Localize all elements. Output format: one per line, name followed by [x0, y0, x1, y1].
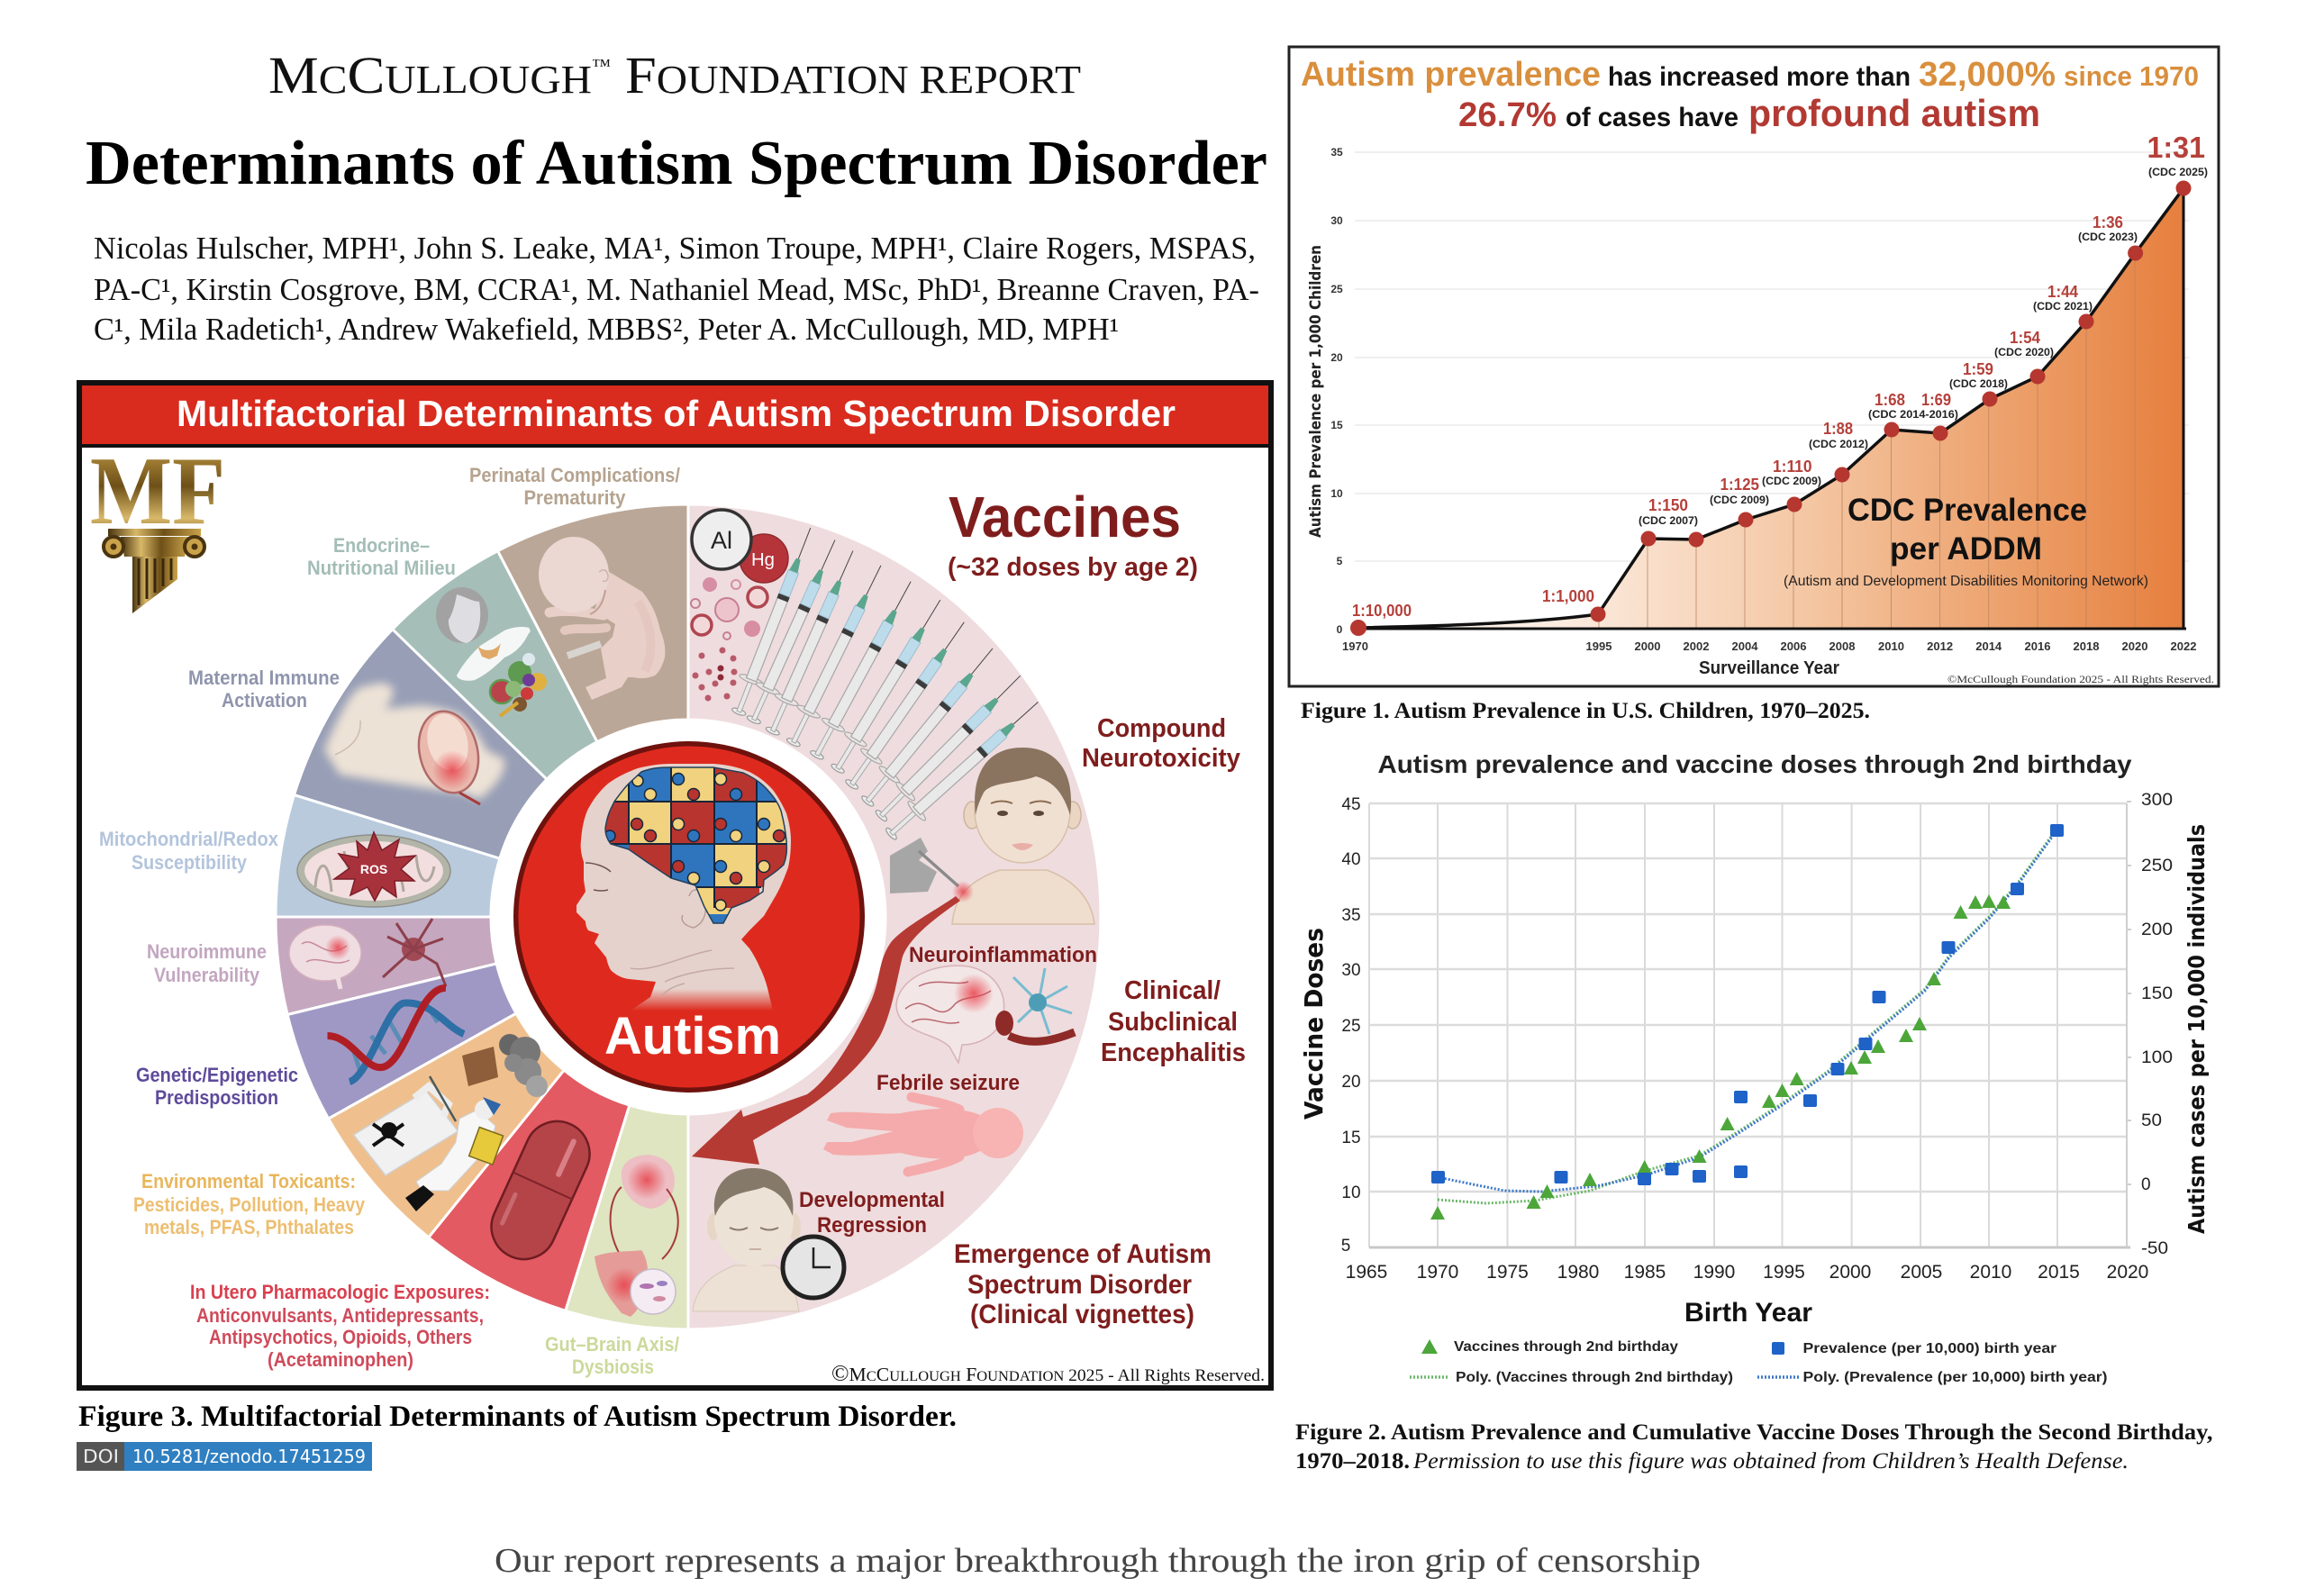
- label: neuroimmune: Vulnerability: [154, 964, 260, 986]
- headline: Autism prevalence: [1301, 56, 1601, 94]
- label: endocrine: [307, 534, 456, 579]
- legend: Poly. (Vaccines through 2nd birthday): [1456, 1370, 1733, 1385]
- figure 2 chart: prevalence and vaccine doses: [1299, 750, 2210, 1385]
- label: pharmacologic exposures: (Acetaminophen): [268, 1348, 413, 1371]
- segment: gut-brain: [566, 1105, 688, 1329]
- legend: Vaccines through 2nd birthday: [1454, 1339, 1678, 1355]
- icon: woman with thyroid and food: [436, 587, 547, 716]
- icon: aluminium and mercury circles: Al: [711, 527, 732, 554]
- label: maternal immune: [188, 667, 340, 712]
- label: compound neurotoxicity: [1082, 714, 1240, 773]
- icon: brain and microglia: [289, 919, 446, 989]
- prevalence ratio labels: 1:150: [1648, 496, 1688, 514]
- heading: vaccines: Vaccines: [949, 485, 1181, 549]
- prevalence ratio labels: 1:125: [1720, 476, 1759, 494]
- chart: CDC prevalence area chart: [1307, 131, 2214, 685]
- label: encephalitis: [1101, 976, 1246, 1067]
- copyright line: ©MCCULLOUGH FOUNDATION 2025 - All Rights Reserved.: [831, 1362, 1265, 1386]
- panel: multifactorial determinants wheel: [79, 383, 1271, 1388]
- prevalence ratio labels: (CDC 2012): [1809, 438, 1868, 450]
- icon: infant receiving injection: [890, 748, 1094, 924]
- y axis ticks: 15: [1330, 419, 1343, 431]
- prevalence ratio labels: (CDC 2020): [1994, 346, 2054, 358]
- x axis labels: 1990: [1693, 1262, 1735, 1283]
- left axis labels: 20: [1341, 1073, 1361, 1092]
- heading: vaccines: (~32 doses by age 2): [948, 553, 1198, 582]
- prevalence ratio labels: 1:10,000: [1352, 602, 1412, 620]
- segment: pharmacologic: [429, 1070, 630, 1310]
- label: mitochondrial: Susceptibility: [132, 851, 248, 874]
- label: environmental toxicants: [133, 1170, 366, 1238]
- label: pharmacologic exposures: Anticonvulsants, Antidepressants,: [196, 1304, 484, 1327]
- prevalence ratio labels: (CDC 2018): [1949, 377, 2008, 390]
- x axis labels: 1985: [1624, 1262, 1666, 1283]
- segment: endocrine: [393, 551, 597, 779]
- x axis labels: 1995: [1763, 1262, 1805, 1283]
- label: compound neurotoxicity: Neurotoxicity: [1082, 744, 1240, 773]
- right axis labels: 100: [2141, 1048, 2173, 1067]
- x axis ticks: [1342, 639, 2196, 653]
- DOI badge: DOI: [83, 1446, 119, 1467]
- label: encephalitis: Clinical/: [1124, 976, 1221, 1005]
- x axis ticks: 2008: [1829, 639, 1855, 653]
- icon: gut-brain axis: [595, 1155, 678, 1317]
- chart: wheel segments: [276, 504, 1101, 1329]
- label: maternal immune: Maternal Immune: [188, 667, 340, 689]
- label: febrile seizure: Febrile seizure: [876, 1071, 1020, 1095]
- label: emergence of autism: Spectrum Disorder: [967, 1270, 1192, 1300]
- prevalence ratio labels: 1:68: [1875, 391, 1905, 409]
- foundation wordmark: ™: [592, 56, 611, 76]
- right axis labels: 300: [2141, 791, 2173, 810]
- headline: 32,000%: [1919, 56, 2056, 94]
- foundation wordmark: F: [611, 46, 657, 104]
- wheel labels: right side: [799, 485, 1265, 1386]
- left axis labels: 40: [1341, 850, 1361, 869]
- label: compound neurotoxicity: Compound: [1097, 714, 1226, 743]
- x axis ticks: 2022: [2171, 639, 2196, 653]
- label: pharmacologic exposures: In Utero Pharmacologic Exposures:: [190, 1281, 490, 1303]
- x axis labels: 1970: [1417, 1262, 1458, 1283]
- headline: since 1970: [2064, 60, 2199, 92]
- prevalence ratio labels: (CDC 2007): [1639, 514, 1698, 527]
- figure 3 caption: Figure 3. Multifactorial Determinants of Autism Spectrum Disorder.: [78, 1401, 957, 1433]
- right axis labels: 200: [2141, 920, 2173, 939]
- figure 2 chart: prevalence and vaccine doses: Birth Year: [1684, 1298, 1812, 1328]
- x axis labels: 2015: [2038, 1262, 2080, 1283]
- series: vaccines through 2nd birthday: [1430, 894, 2011, 1220]
- copyright: ©McCullough Foundation 2025 - All Rights Reserved.: [1947, 673, 2214, 685]
- figure 2 caption: Figure 2. Autism Prevalence and Cumulative Vaccine Doses Through the Second Birthday,: [1295, 1420, 2212, 1445]
- x axis labels: 1975: [1486, 1262, 1529, 1283]
- icon: MF column logo: MF: [90, 438, 225, 545]
- label: developmental regression: Regression: [817, 1213, 927, 1238]
- plot grid: [1369, 802, 2131, 1247]
- segment: environmental: [329, 1013, 564, 1238]
- x axis ticks: 2002: [1684, 639, 1709, 653]
- label: perinatal: [469, 464, 680, 509]
- authors: PA-C¹, Kirstin Cosgrove, BM, CCRA¹, M. Nathaniel Mead, MSc, PhD¹, Breanne Craven, PA-: [94, 272, 1259, 307]
- icon: central autism circle: [513, 741, 865, 1093]
- axis titles: Autism Prevalence per 1,000 Children: [1307, 245, 1325, 538]
- prevalence ratio labels: 1:110: [1773, 458, 1812, 476]
- left axis labels: 30: [1341, 961, 1361, 980]
- label: perinatal: Perinatal Complications/: [469, 464, 680, 486]
- y axis ticks: 30: [1330, 214, 1343, 227]
- icon: capsule pill: [481, 1111, 600, 1270]
- y axis ticks: 0: [1337, 623, 1343, 636]
- icon: aluminium and mercury circles: [692, 510, 788, 583]
- x axis labels: [1346, 1262, 2148, 1283]
- right axis labels: [2141, 791, 2173, 1258]
- label: perinatal: Prematurity: [524, 486, 626, 509]
- prevalence ratio labels: 1:36: [2093, 213, 2123, 231]
- main title: Determinants of Autism Spectrum Disorder: [86, 129, 1267, 198]
- label: gut-brain: Dysbiosis: [572, 1356, 654, 1378]
- prevalence ratio labels: 1:59: [1963, 360, 1993, 378]
- icon: sleeping child and clock: [693, 1168, 844, 1311]
- x axis labels: 2000: [1829, 1262, 1871, 1283]
- x axis ticks: 2010: [1878, 639, 1904, 653]
- label: developmental regression: [799, 1188, 945, 1238]
- right axis labels: 250: [2141, 857, 2173, 875]
- panel header bar: [82, 385, 1268, 448]
- label: endocrine: Nutritional Milieu: [307, 557, 456, 579]
- prevalence ratio labels: (CDC 2023): [2078, 231, 2138, 243]
- label: encephalitis: Encephalitis: [1101, 1038, 1246, 1067]
- report header: [86, 46, 1267, 347]
- prevalence ratio labels: 1:88: [1823, 420, 1853, 438]
- x axis ticks: 2006: [1781, 639, 1806, 653]
- headline: 26.7%: [1458, 96, 1557, 134]
- prevalence ratio labels: (CDC 2025): [2148, 166, 2208, 178]
- legend: Prevalence (per 10,000) birth year: [1803, 1341, 2056, 1356]
- prevalence ratio labels: 1:54: [2010, 329, 2040, 347]
- label: emergence of autism: [954, 1239, 1212, 1329]
- figure 2 caption: [1295, 1420, 2212, 1474]
- x axis ticks: 1995: [1586, 639, 1611, 653]
- left axis labels: 15: [1341, 1129, 1361, 1147]
- x axis ticks: 2000: [1635, 639, 1660, 653]
- arrow: curved progression arrow: [692, 896, 960, 1165]
- left axis labels: 10: [1341, 1183, 1361, 1202]
- label: neuroimmune: Neuroimmune: [147, 940, 267, 963]
- figure 2 caption: Permission to use this figure was obtained from Children’s Health Defense.: [1412, 1449, 2129, 1474]
- label: maternal immune: Activation: [222, 689, 307, 712]
- label: pharmacologic exposures: Antipsychotics, Opioids, Others: [209, 1326, 472, 1348]
- label: environmental toxicants: Environmental Toxicants:: [141, 1170, 356, 1192]
- x axis ticks: 2016: [2025, 639, 2050, 653]
- DOI badge: [77, 1442, 372, 1471]
- y axis ticks: 20: [1330, 351, 1343, 364]
- icon: virus and particle cluster: [691, 577, 767, 701]
- heading: vaccines: [948, 485, 1198, 582]
- authors: C¹, Mila Radetich¹, Andrew Wakefield, MBBS², Peter A. McCullough, MD, MPH¹: [94, 312, 1119, 347]
- figure 2 chart: prevalence and vaccine doses: Autism cases per 10,000 individuals: [2183, 824, 2210, 1234]
- icon: febrile infant: [823, 1097, 1023, 1172]
- icon: fetus: [539, 537, 665, 700]
- right axis labels: -50: [2141, 1239, 2168, 1258]
- prevalence ratio labels: 1:69: [1921, 391, 1951, 409]
- label: developmental regression: Developmental: [799, 1188, 945, 1212]
- foundation wordmark: MCCULLOUGH: [268, 46, 576, 104]
- chart title: Autism prevalence and vaccine doses through 2nd birthday: [1378, 750, 2132, 778]
- label: neuroimmune: [147, 940, 267, 986]
- chart annotation: CDC Prevalence: [1848, 493, 2087, 528]
- icon: mitochondrion with ROS: [297, 832, 450, 907]
- headline: profound autism: [1748, 92, 2040, 134]
- segment: genetic: [287, 964, 516, 1119]
- x axis labels: 2020: [2107, 1262, 2148, 1283]
- legend: Poly. (Prevalence (per 10,000) birth year): [1803, 1370, 2108, 1385]
- axis titles: Vaccine Doses: [1299, 928, 1329, 1120]
- label: emergence of autism: Emergence of Autism: [954, 1239, 1212, 1269]
- label: endocrine: Endocrine–: [333, 534, 430, 557]
- x axis labels: 2005: [1901, 1262, 1942, 1283]
- headline: has increased more than: [1608, 62, 1911, 92]
- left axis labels: 45: [1341, 795, 1361, 814]
- label: neuroinflammation: Neuroinflammation: [909, 943, 1097, 967]
- x axis ticks: 2012: [1927, 639, 1953, 653]
- segment: vaccines: [688, 504, 1101, 1329]
- prevalence ratio labels: (CDC 2021): [2033, 300, 2093, 313]
- label: genetic: [136, 1064, 298, 1109]
- y axis ticks: 25: [1330, 283, 1343, 295]
- prevalence ratio labels: (CDC 2014-2016): [1868, 408, 1958, 421]
- y axis ticks: 5: [1337, 555, 1343, 567]
- icon: mitochondrion with ROS: ROS: [360, 862, 387, 876]
- segment: mitochondrial: [276, 795, 500, 917]
- label: mitochondrial: [99, 828, 279, 874]
- autism label: Autism: [604, 1007, 781, 1066]
- right axis labels: 0: [2141, 1175, 2151, 1194]
- icon: inflamed brain and astrocyte: [896, 966, 1075, 1063]
- icon: child profile with puzzle brain: [576, 757, 797, 1011]
- segment: maternal immune: [294, 630, 547, 858]
- icon: MF column logo: [90, 438, 225, 613]
- figure 2 caption: 1970–2018.: [1295, 1449, 1410, 1474]
- data points: [1350, 180, 2191, 636]
- legend: [1410, 1339, 2108, 1385]
- x axis ticks: 1970: [1342, 639, 1368, 653]
- wheel labels: left side: [99, 464, 680, 1378]
- DOI badge: 10.5281/zenodo.17451259: [132, 1446, 366, 1467]
- icon: ten syringes: [726, 523, 1047, 845]
- x axis labels: 1965: [1346, 1262, 1387, 1283]
- chart annotation: (Autism and Development Disabilities Monitoring Network): [1784, 574, 2148, 589]
- y axis ticks: 10: [1330, 487, 1343, 500]
- right axis labels: 50: [2141, 1111, 2162, 1130]
- authors: [94, 231, 1259, 347]
- x axis ticks: 2018: [2074, 639, 2099, 653]
- prevalence ratio labels: 1:31: [2147, 131, 2205, 164]
- icon: DNA helix: [328, 988, 464, 1082]
- headline: of cases have: [1566, 103, 1739, 132]
- label: emergence of autism: (Clinical vignettes): [970, 1300, 1194, 1329]
- label: gut-brain: Gut–Brain Axis/: [545, 1333, 679, 1356]
- label: pharmacologic exposures: [190, 1281, 490, 1371]
- prevalence ratio labels: (CDC 2009): [1710, 494, 1769, 506]
- page caption: Our report represents a major breakthrough through the iron grip of censorship: [495, 1542, 1701, 1580]
- prevalence ratio labels: [1352, 131, 2208, 620]
- label: encephalitis: Subclinical: [1108, 1008, 1238, 1037]
- segment: perinatal: [497, 504, 688, 742]
- icon: pregnant abdomen: [324, 683, 504, 804]
- chart: CDC prevalence area chart: Surveillance Year: [1699, 658, 1839, 678]
- label: mitochondrial: Mitochondrial/Redox: [99, 828, 279, 850]
- segment: neuroimmune: [276, 917, 496, 1014]
- left axis labels: 25: [1341, 1017, 1361, 1036]
- panel header bar: Multifactorial Determinants of Autism Spectrum Disorder: [177, 393, 1176, 434]
- left axis labels: 35: [1341, 906, 1361, 925]
- label: environmental toxicants: metals, PFAS, Phthalates: [144, 1216, 354, 1238]
- trend lines: [1438, 834, 2053, 1203]
- left axis labels: 5: [1341, 1237, 1350, 1256]
- figure 1 panel: autism prevalence: [1289, 47, 2219, 686]
- label: genetic: Predisposition: [155, 1086, 278, 1109]
- label: gut-brain: [545, 1333, 679, 1378]
- x axis ticks: 2014: [1975, 639, 2002, 653]
- figure 1 caption: Figure 1. Autism Prevalence in U.S. Children, 1970–2025.: [1301, 699, 1870, 723]
- headline: [1301, 56, 2199, 134]
- icon: pesticide worker, jug and factory: [353, 1034, 548, 1211]
- y axis ticks: [1330, 146, 1343, 636]
- x axis labels: 1980: [1557, 1262, 1599, 1283]
- label: environmental toxicants: Pesticides, Pollution, Heavy: [133, 1193, 366, 1216]
- y axis ticks: 35: [1330, 146, 1343, 159]
- prevalence ratio labels: (CDC 2009): [1762, 475, 1821, 487]
- chart annotation: [1784, 493, 2148, 589]
- series: prevalence per 10,000: [1431, 824, 2064, 1185]
- x axis ticks: 2004: [1732, 639, 1758, 653]
- foundation wordmark: OUNDATION REPORT: [657, 58, 1081, 102]
- chart annotation: per ADDM: [1890, 531, 2042, 567]
- right axis labels: 150: [2141, 984, 2173, 1003]
- label: genetic: Genetic/Epigenetic: [136, 1064, 298, 1086]
- icon: aluminium and mercury circles: Hg: [751, 550, 775, 570]
- prevalence ratio labels: 1:1,000: [1542, 587, 1594, 605]
- x axis labels: 2010: [1970, 1262, 2011, 1283]
- authors: Nicolas Hulscher, MPH¹, John S. Leake, MA¹, Simon Troupe, MPH¹, Claire Rogers, MSPAS,: [94, 231, 1256, 266]
- left axis labels: [1341, 795, 1361, 1256]
- prevalence ratio labels: 1:44: [2047, 283, 2078, 301]
- x axis ticks: 2020: [2122, 639, 2147, 653]
